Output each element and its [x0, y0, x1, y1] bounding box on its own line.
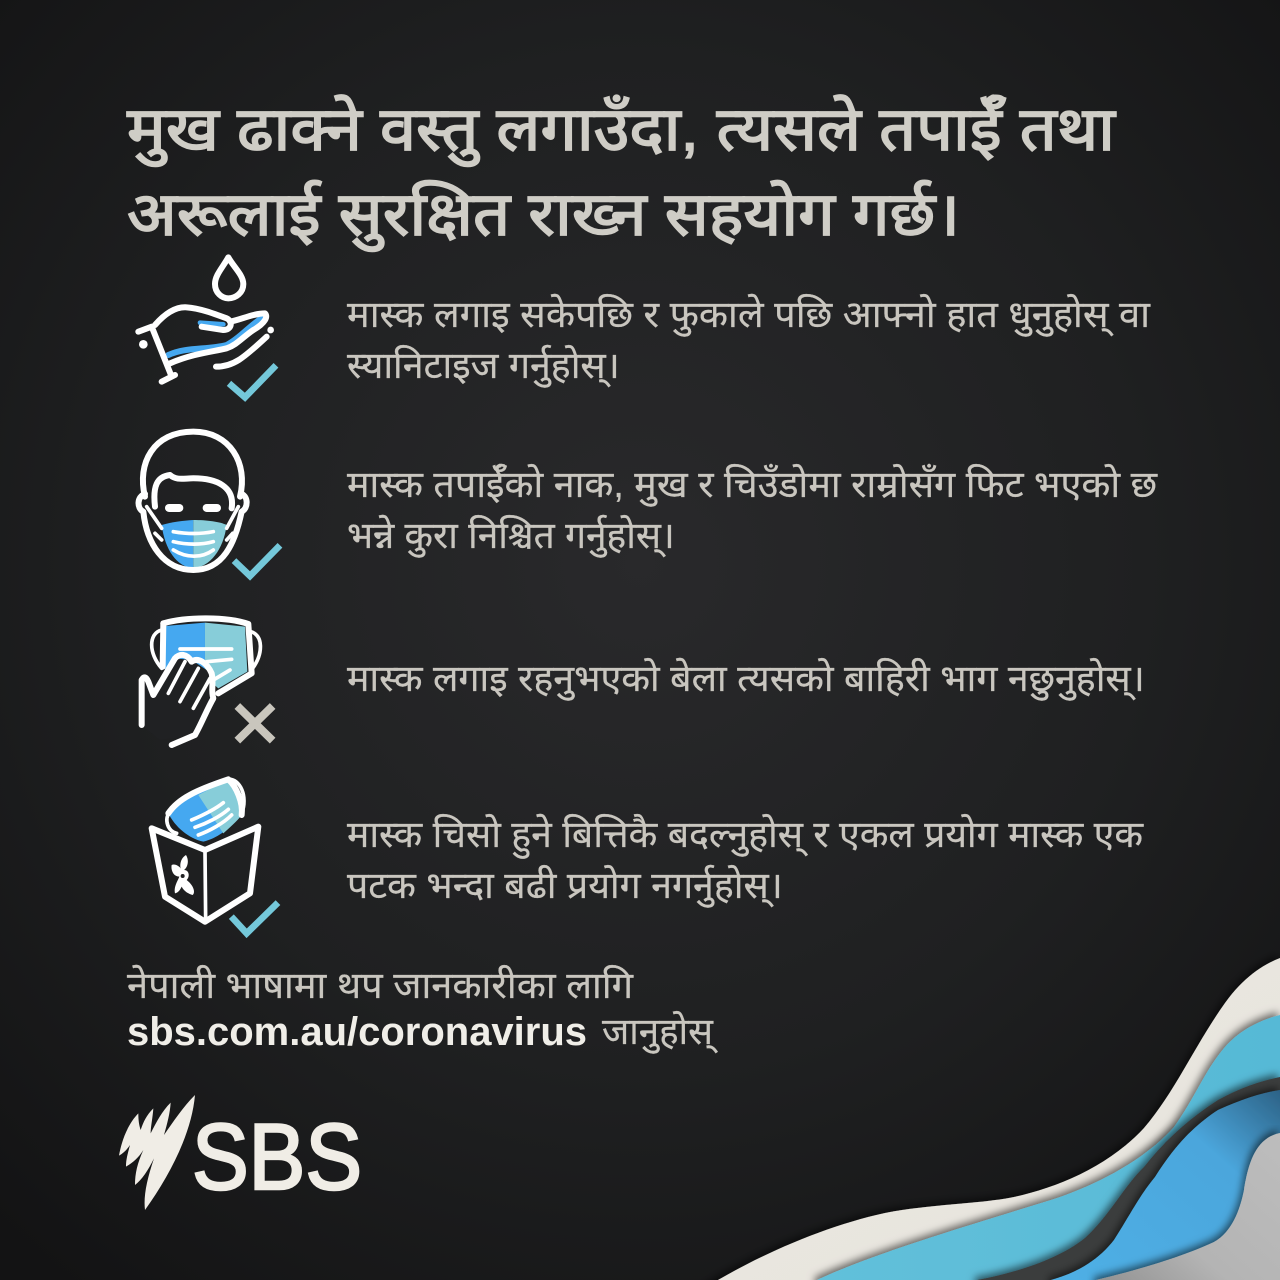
text: replace mask: पटक भन्दा बढी प्रयोग नगर्नुहोस्। [347, 864, 783, 908]
icon: hand washing with check [138, 257, 276, 397]
decorative layered waves [700, 958, 1280, 1280]
title [127, 95, 1116, 252]
title: अरूलाई सुरक्षित राख्न सहयोग गर्छ। [127, 180, 960, 252]
text: mask fit [347, 463, 1158, 558]
icon: face with mask and check [139, 432, 280, 576]
SBS logo [119, 1095, 362, 1210]
cross mark [237, 706, 273, 741]
text: wash hands: मास्क लगाइ सकेपछि र फुकाले पछि आफ्नो हात धुनुहोस् वा [347, 294, 1151, 337]
waratah mark [119, 1095, 195, 1210]
title: मुख ढाक्ने वस्तु लगाउँदा, त्यसले तपाईँ तथा [127, 95, 1116, 167]
check mark [231, 903, 278, 933]
hand [138, 307, 274, 382]
footer text: sbs.com.au/coronavirus [127, 1010, 587, 1054]
SBS logo: SBS [192, 1104, 362, 1209]
text: replace mask [347, 814, 1144, 908]
check mark [229, 365, 276, 397]
text: wash hands: स्यानिटाइज गर्नुहोस्। [347, 344, 620, 388]
text: wash hands [347, 294, 1151, 388]
check mark [234, 545, 280, 576]
footer text: जानुहोस् [602, 1011, 718, 1054]
footer text: नेपाली भाषामा थप जानकारीका लागि [127, 965, 634, 1006]
text: mask fit: मास्क तपाईँको नाक, मुख र चिउँडोमा राम्रोसँग फिट भएको छ [347, 463, 1158, 507]
text: mask fit: भन्ने कुरा निश्चित गर्नुहोस्। [347, 514, 675, 558]
water drop [215, 257, 243, 298]
footer text [127, 965, 718, 1054]
icon: do not touch mask [142, 618, 273, 745]
text: do not touch: मास्क लगाइ रहनुभएको बेला त्यसको बाहिरी भाग नछुनुहोस्। [347, 658, 1145, 701]
icon: mask in bin with check [152, 779, 278, 933]
text: replace mask: मास्क चिसो हुने बित्तिकै बदल्नुहोस् र एकल प्रयोग मास्क एक [347, 814, 1144, 859]
bin logo [171, 855, 194, 895]
